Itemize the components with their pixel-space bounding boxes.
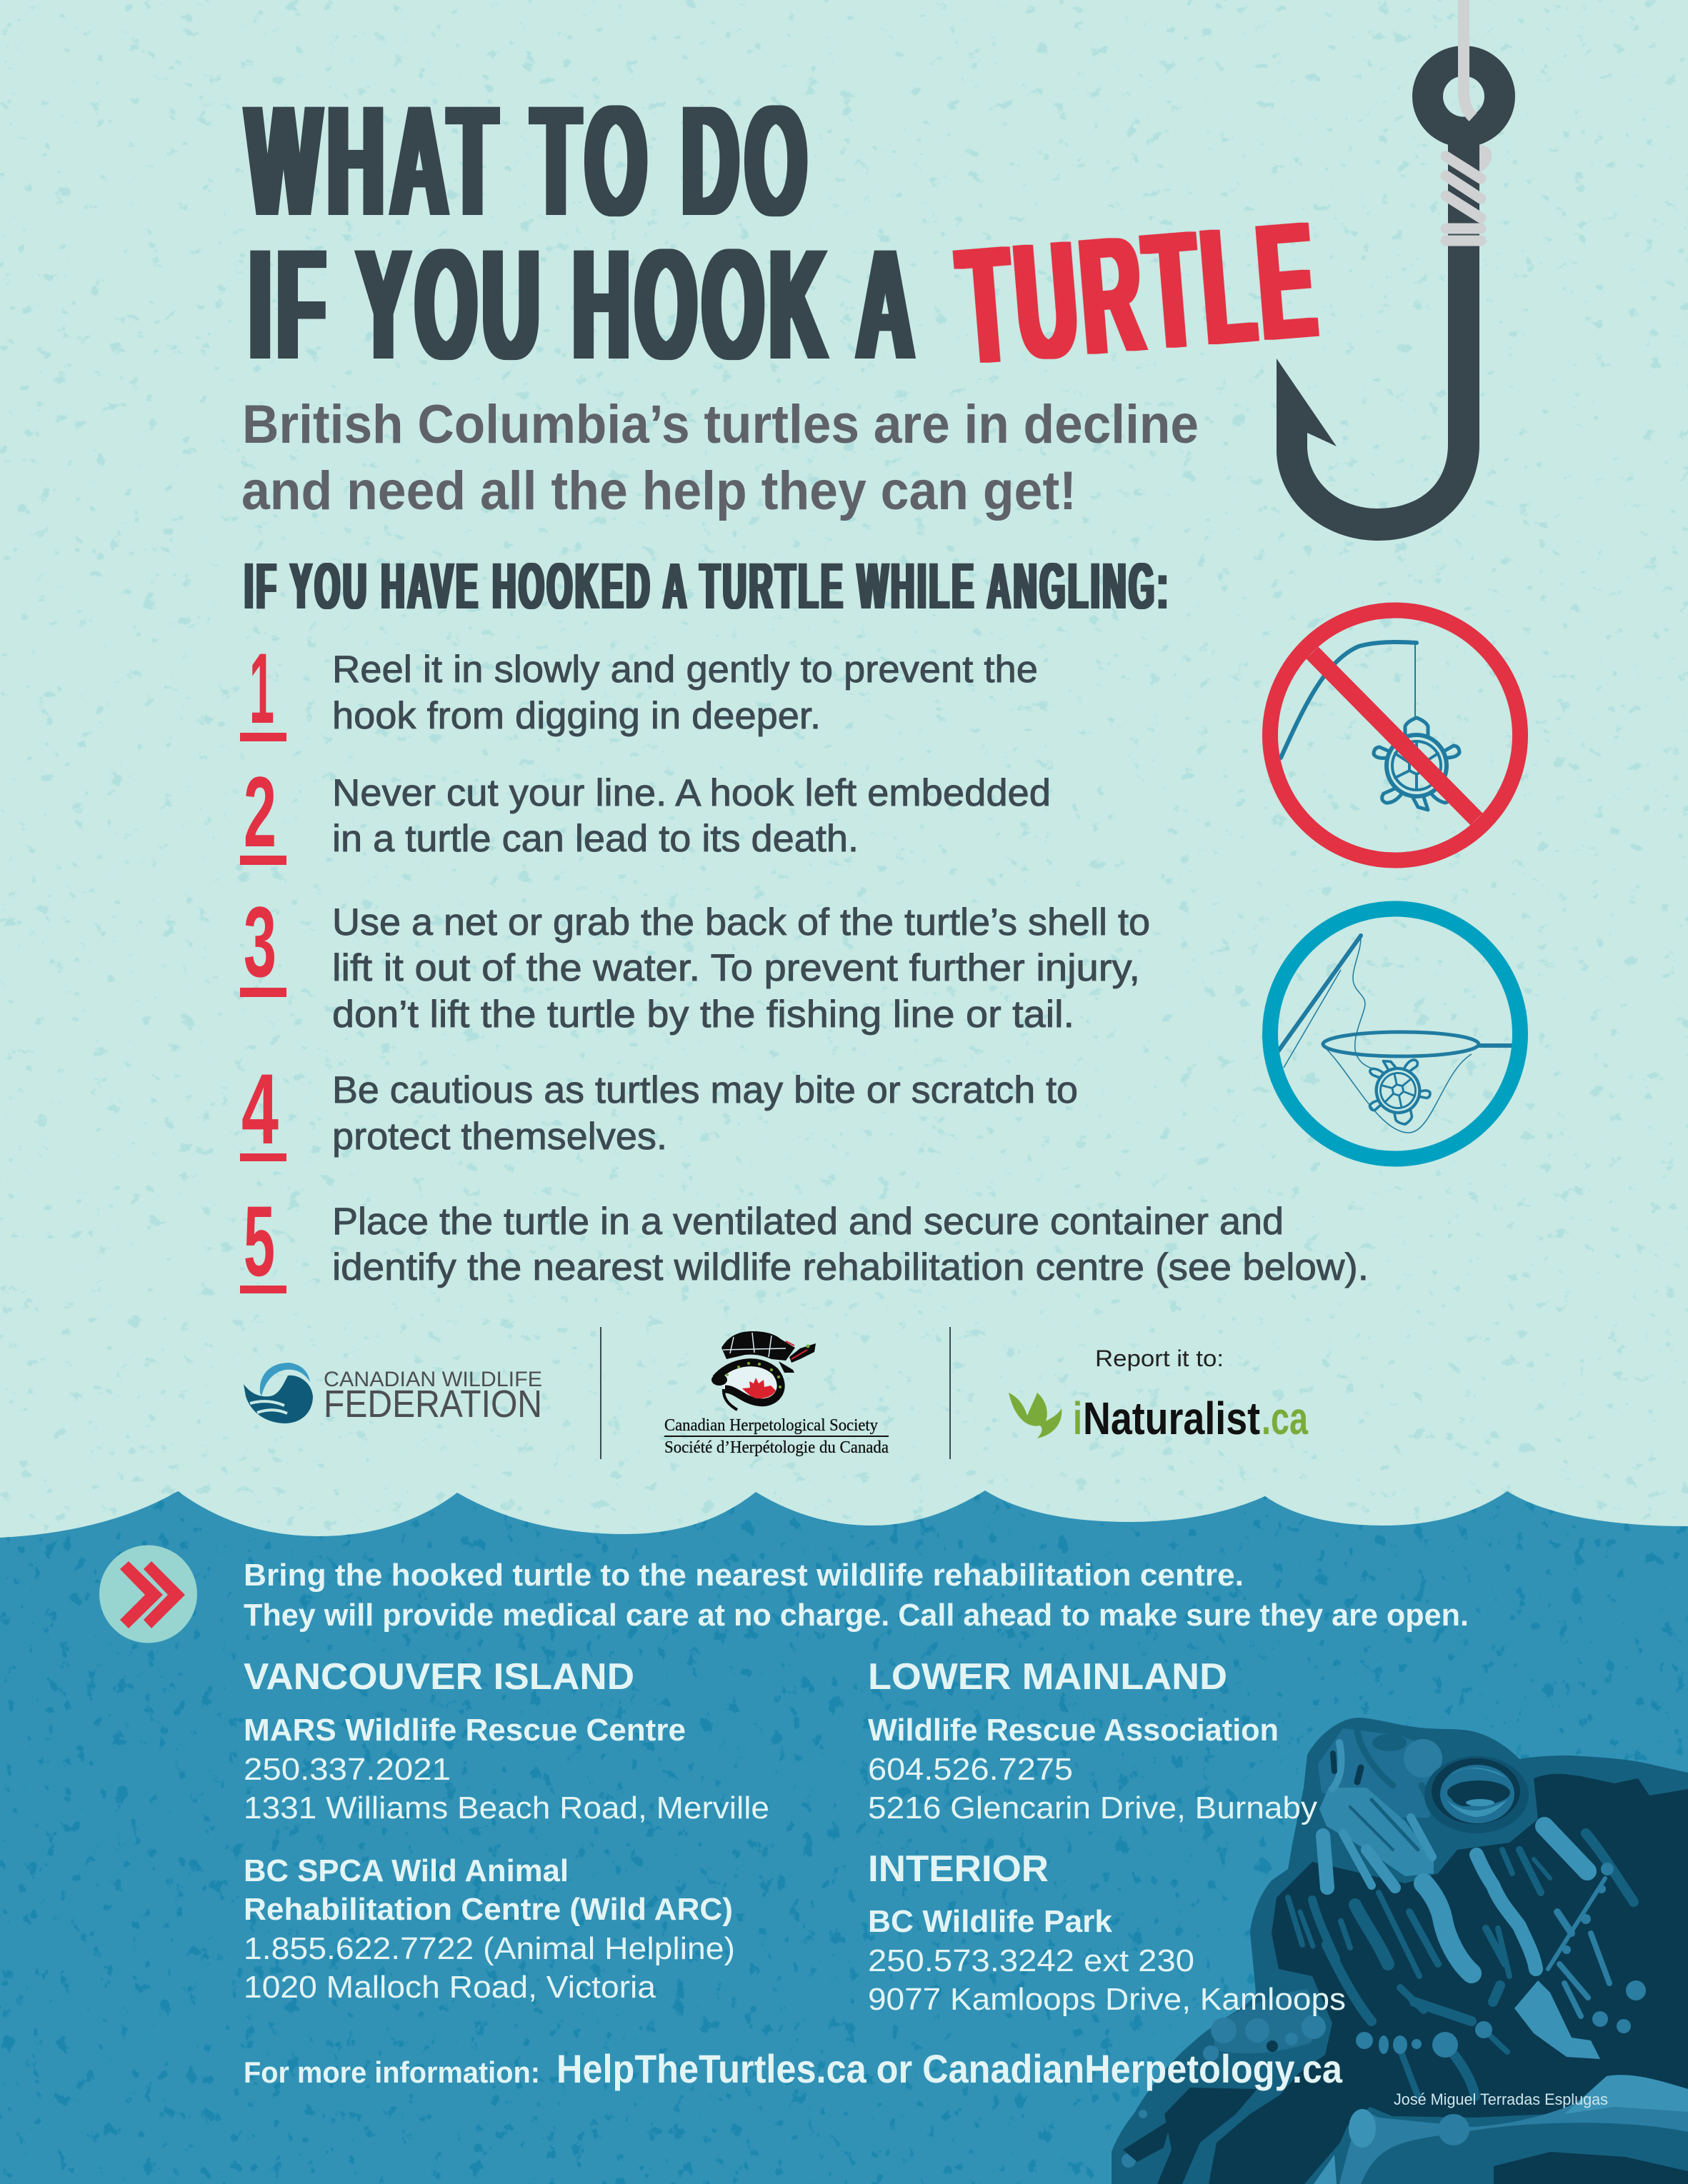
logo: iNaturalist: i bbox=[1073, 1393, 1082, 1444]
centre: Wildlife Rescue Association: 604.526.7275 bbox=[868, 1752, 1073, 1787]
logo text: FEDERATION bbox=[324, 1383, 542, 1426]
centre: BC Wildlife Park bbox=[868, 1904, 1346, 2017]
report it to: Report it to: bbox=[1095, 1346, 1224, 1371]
rescue callout bbox=[244, 1558, 1469, 1633]
step 4 bbox=[240, 1053, 1078, 1165]
centre: Wild ARC: Rehabilitation Centre (Wild ARC) bbox=[244, 1892, 733, 1927]
number 4: 4 bbox=[241, 1053, 279, 1165]
icon: double chevron bbox=[99, 1546, 197, 1643]
subtitle: British Columbia’s turtles are in decline bbox=[242, 394, 1199, 455]
rescue callout: Bring the hooked turtle to the nearest wildlife rehabilitation centre. bbox=[244, 1558, 1244, 1593]
step 4 text bbox=[332, 1069, 1078, 1158]
step 2 text bbox=[332, 772, 1051, 860]
centre: Wildlife Rescue Association bbox=[868, 1713, 1317, 1825]
region: Vancouver Island bbox=[244, 1656, 769, 2005]
more information: HelpTheTurtles.ca or CanadianHerpetology.ca bbox=[556, 2046, 1343, 2091]
step 1 text bbox=[332, 648, 1038, 737]
rescue callout: They will provide medical care at no charge. Call ahead to make sure they are open. bbox=[244, 1598, 1469, 1633]
number 5: 5 bbox=[244, 1185, 275, 1297]
neck stripes bbox=[1288, 1826, 1634, 2096]
head highlights bbox=[1318, 1728, 1443, 1876]
centre: Wildlife Rescue Association: 5216 Glencarin Drive, Burnaby bbox=[868, 1790, 1317, 1825]
centre: BC Wildlife Park: 250.573.3242 ext 230 bbox=[868, 1943, 1194, 1978]
logo: Canadian Herpetological Society bbox=[664, 1331, 889, 1457]
centre: Wild ARC: 1.855.622.7722 (Animal Helpline) bbox=[244, 1931, 735, 1966]
logo: iNaturalist: .ca bbox=[1262, 1393, 1308, 1444]
step 5 text: identify the nearest wildlife rehabilitation centre (see below). bbox=[332, 1246, 1369, 1288]
section heading: IF YOU HAVE HOOKED A TURTLE WHILE ANGLING: bbox=[244, 551, 1168, 623]
step 5 text bbox=[332, 1201, 1369, 1288]
title word: turtle: TURTLE bbox=[953, 186, 1321, 399]
region: Interior bbox=[868, 1848, 1346, 2017]
society names: Canadian Herpetological Society bbox=[664, 1416, 878, 1435]
centre: Wild ARC bbox=[244, 1853, 735, 2005]
shell bbox=[1314, 2075, 1688, 2184]
step 1 text: hook from digging in deeper. bbox=[332, 695, 821, 737]
photo credit: José Miguel Terradas Esplugas bbox=[1394, 2090, 1608, 2108]
number 2: 2 bbox=[244, 756, 276, 868]
step 1 text: Reel it in slowly and gently to prevent the bbox=[332, 648, 1038, 691]
icon: do not cut the line bbox=[1270, 610, 1520, 860]
title line: what to do: WHAT TO DO bbox=[246, 73, 806, 249]
number 3: 3 bbox=[244, 886, 276, 998]
centre: MARS: 250.337.2021 bbox=[244, 1752, 451, 1787]
turtle photo illustration bbox=[1112, 1718, 1688, 2184]
step 4 text: protect themselves. bbox=[332, 1116, 667, 1158]
eye bbox=[1424, 1756, 1529, 1833]
icon: use a net bbox=[1270, 908, 1520, 1158]
heading: VANCOUVER ISLAND bbox=[244, 1656, 634, 1698]
step 1: 1 bbox=[249, 632, 274, 744]
heading: INTERIOR bbox=[868, 1848, 1049, 1890]
step 3 text: Use a net or grab the back of the turtle’s shell to bbox=[332, 901, 1150, 943]
logo: Canadian Wildlife Federation bbox=[244, 1363, 542, 1426]
subtitle: and need all the help they can get! bbox=[241, 461, 1077, 521]
centre: Wild ARC: BC SPCA Wild Animal bbox=[244, 1853, 569, 1888]
society names bbox=[664, 1416, 889, 1457]
icon: fishing hook bbox=[1277, 0, 1515, 541]
dark neck and body bbox=[1209, 1774, 1688, 2184]
logo text: CANADIAN WILDLIFE bbox=[324, 1368, 542, 1391]
more information: For more information: bbox=[244, 2055, 540, 2089]
step 3 text: lift it out of the water. To prevent further injury, bbox=[332, 947, 1140, 989]
step 1 bbox=[240, 632, 1038, 744]
step 2 text: in a turtle can lead to its death. bbox=[332, 818, 859, 860]
arm bbox=[1157, 2088, 1257, 2184]
centre: Wildlife Rescue Association: Wildlife Rescue Association bbox=[868, 1713, 1279, 1748]
step 5 text: Place the turtle in a ventilated and secure container and bbox=[332, 1201, 1284, 1243]
shoulder and leg patches bbox=[1122, 1989, 1326, 2168]
centre: MARS: MARS Wildlife Rescue Centre bbox=[244, 1713, 686, 1748]
centre: BC Wildlife Park: 9077 Kamloops Drive, Kamloops bbox=[868, 1982, 1346, 2017]
society names: Société d’Herpétologie du Canada bbox=[664, 1438, 889, 1457]
centre: MARS: 1331 Williams Beach Road, Merville bbox=[244, 1790, 769, 1825]
title bbox=[246, 73, 1321, 399]
stripe beads and leg spots bbox=[1356, 1863, 1646, 2058]
heading: LOWER MAINLAND bbox=[868, 1656, 1227, 1698]
centre: MARS bbox=[244, 1713, 769, 1825]
subtitle bbox=[241, 394, 1199, 521]
step 5 bbox=[240, 1185, 1369, 1297]
step 3 text: don’t lift the turtle by the fishing line or tail. bbox=[332, 993, 1074, 1036]
more information bbox=[244, 2046, 1343, 2091]
region: Lower Mainland bbox=[868, 1656, 1317, 1825]
step 4 text: Be cautious as turtles may bite or scratch to bbox=[332, 1069, 1078, 1111]
title line: if you hook a: IF YOU HOOK A bbox=[249, 216, 914, 392]
water band bbox=[0, 1491, 1688, 2184]
centre: BC Wildlife Park: BC Wildlife Park bbox=[868, 1904, 1113, 1939]
logo: iNaturalist: Naturalist bbox=[1083, 1393, 1260, 1444]
step 3 text bbox=[332, 901, 1150, 1036]
step 3 bbox=[240, 886, 1150, 1036]
step 2 bbox=[240, 756, 1051, 868]
logo text bbox=[324, 1368, 542, 1426]
centre: Wild ARC: 1020 Malloch Road, Victoria bbox=[244, 1970, 656, 2005]
step 2 text: Never cut your line. A hook left embedded bbox=[332, 772, 1051, 814]
